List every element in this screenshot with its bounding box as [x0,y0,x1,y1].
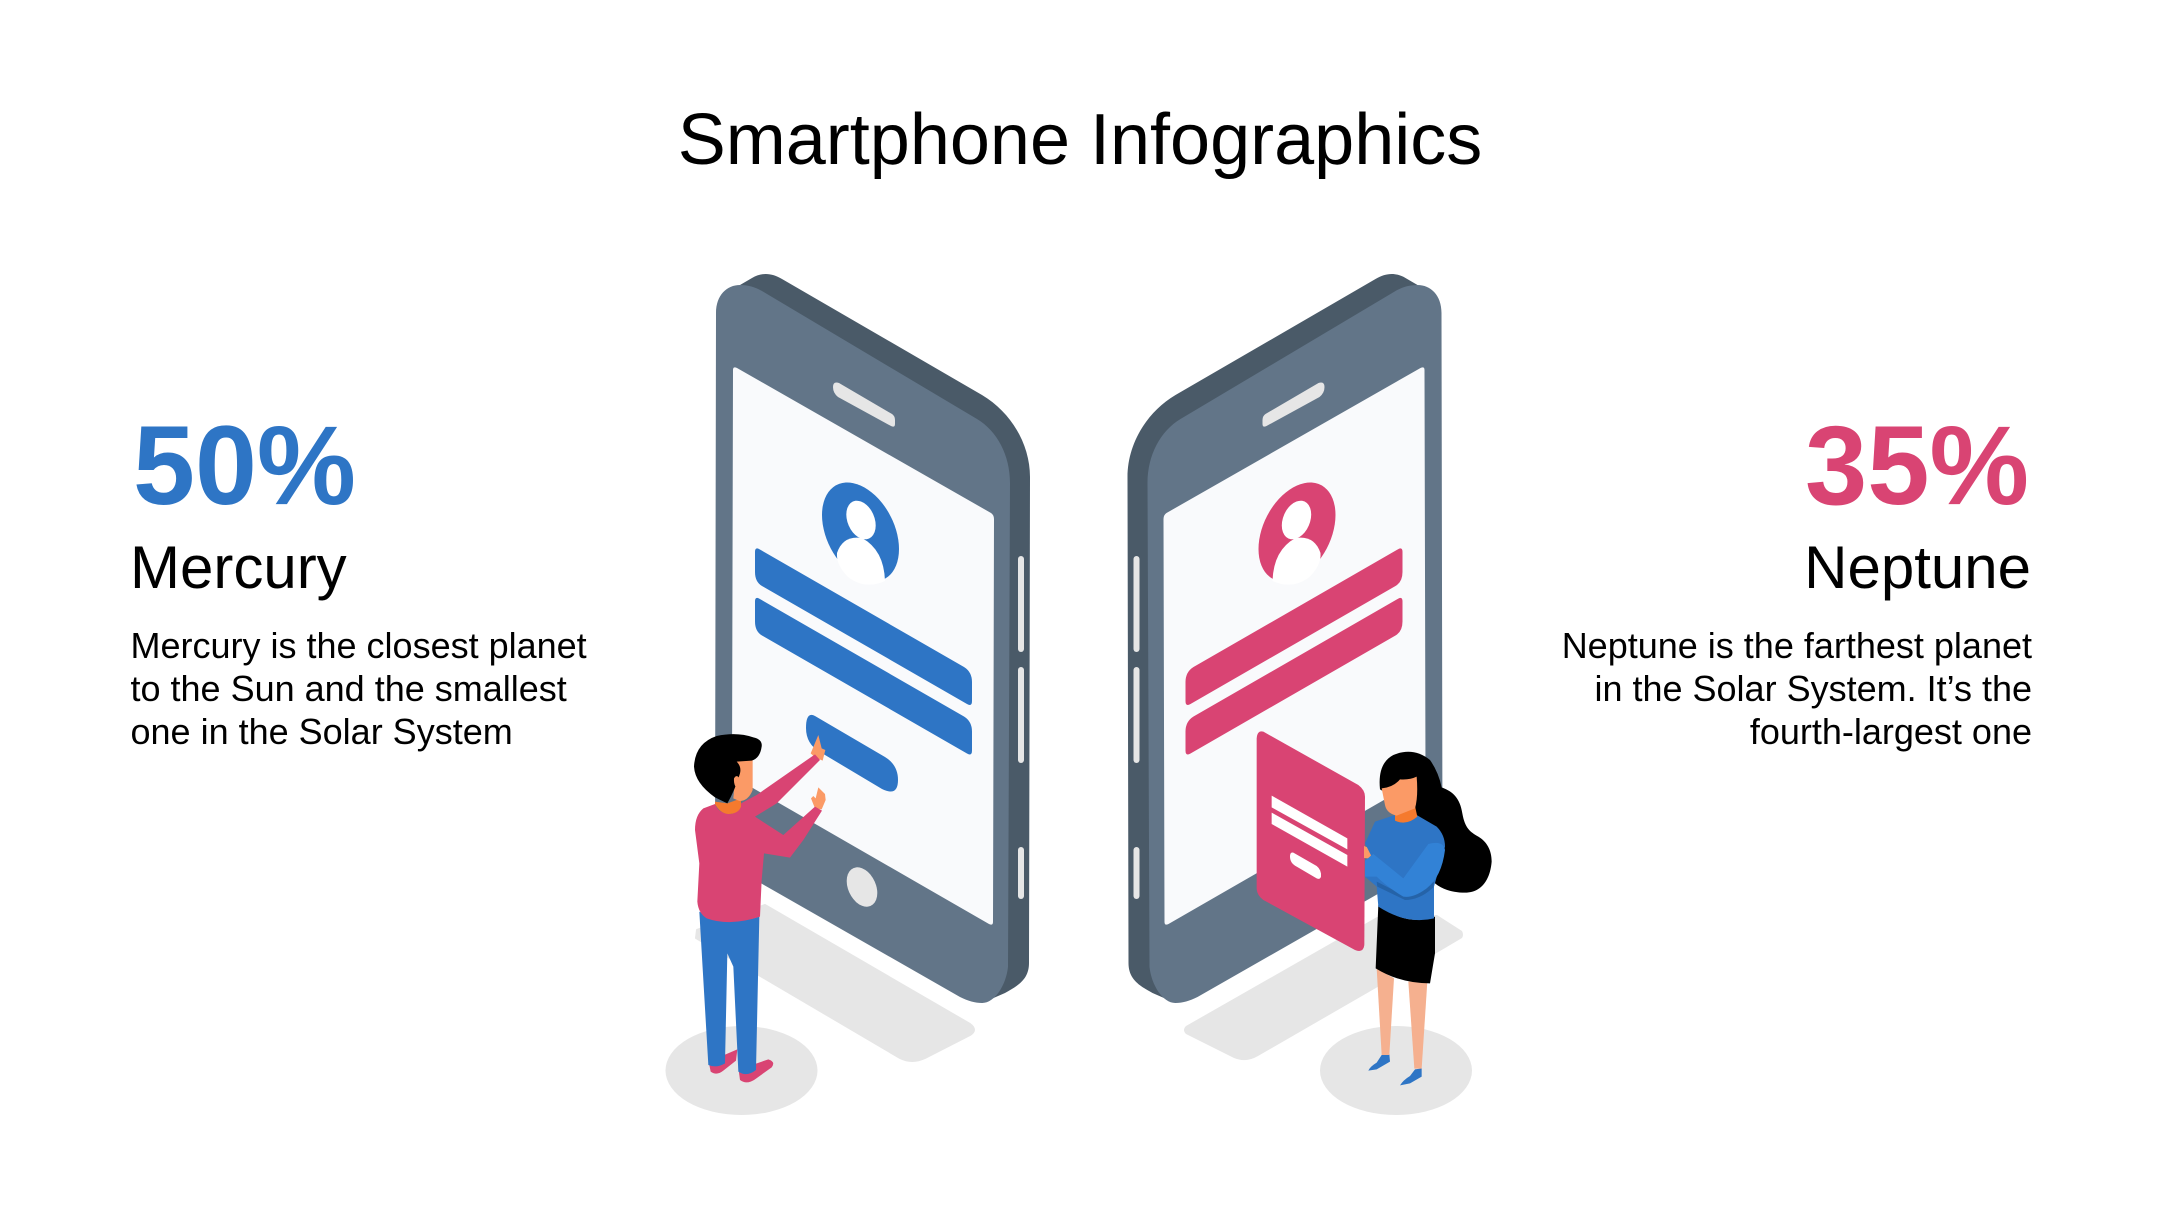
woman hair [1380,752,1492,893]
right phone shadow [1184,915,1463,1060]
left phone [715,274,1030,1003]
man hands [811,735,826,809]
woman crossed arm [1365,843,1445,897]
left phone front [715,285,1010,1003]
right phone side edge [1128,274,1418,1003]
title: Smartphone Infographics [678,100,1482,180]
left form button [806,715,898,792]
Neptune description: Neptune is the farthest planet [1562,625,2032,666]
man hair [694,734,762,803]
right avatar icon [1258,468,1336,596]
Neptune percentage: 35% [1805,403,2029,528]
man face [733,760,753,801]
Neptune description: fourth-largest one [1750,711,2032,752]
left phone side buttons [1018,556,1024,899]
left form fields [755,548,972,754]
Neptune description: in the Solar System. It’s the [1594,668,2032,709]
Mercury description: one in the Solar System [130,711,513,752]
left avatar icon [822,468,899,596]
woman shoes [1368,1054,1422,1085]
right phone screen [1164,367,1426,925]
man ear [734,776,740,791]
right phone [1128,274,1442,1003]
man figure [694,734,826,1082]
right phone side buttons [1134,556,1140,899]
right form fields [1186,548,1402,754]
left phone screen [732,367,994,925]
man trousers [699,912,759,1074]
right phone speaker [1262,382,1324,427]
woman figure [1364,752,1492,1085]
left person floor circle [666,1026,818,1115]
Mercury description: to the Sun and the smallest [130,668,567,709]
man neck [715,798,741,814]
panel: Mercury stat [130,403,587,752]
woman face [1382,777,1417,816]
left phone side edge [740,274,1030,1003]
woman sleeve shadow [1377,882,1434,900]
man shoes [709,1049,773,1082]
woman neck [1395,806,1417,823]
woman sweater [1365,815,1445,920]
panel: Neptune stat [1562,403,2032,752]
right phone front [1148,285,1442,1003]
right person floor circle [1320,1026,1472,1115]
left phone home button [847,862,877,912]
left phone speaker [833,382,895,427]
woman hand [1364,846,1372,858]
pink card held by woman [1257,731,1365,951]
Mercury description: Mercury is the closest planet [130,625,587,666]
Neptune heading: Neptune [1804,534,2031,601]
man sweater [695,754,822,922]
woman skirt [1376,905,1435,983]
Mercury heading: Mercury [130,534,347,601]
woman legs [1377,968,1427,1069]
Mercury percentage: 50% [133,403,356,528]
left phone shadow [696,905,974,1061]
card text lines [1272,796,1347,879]
